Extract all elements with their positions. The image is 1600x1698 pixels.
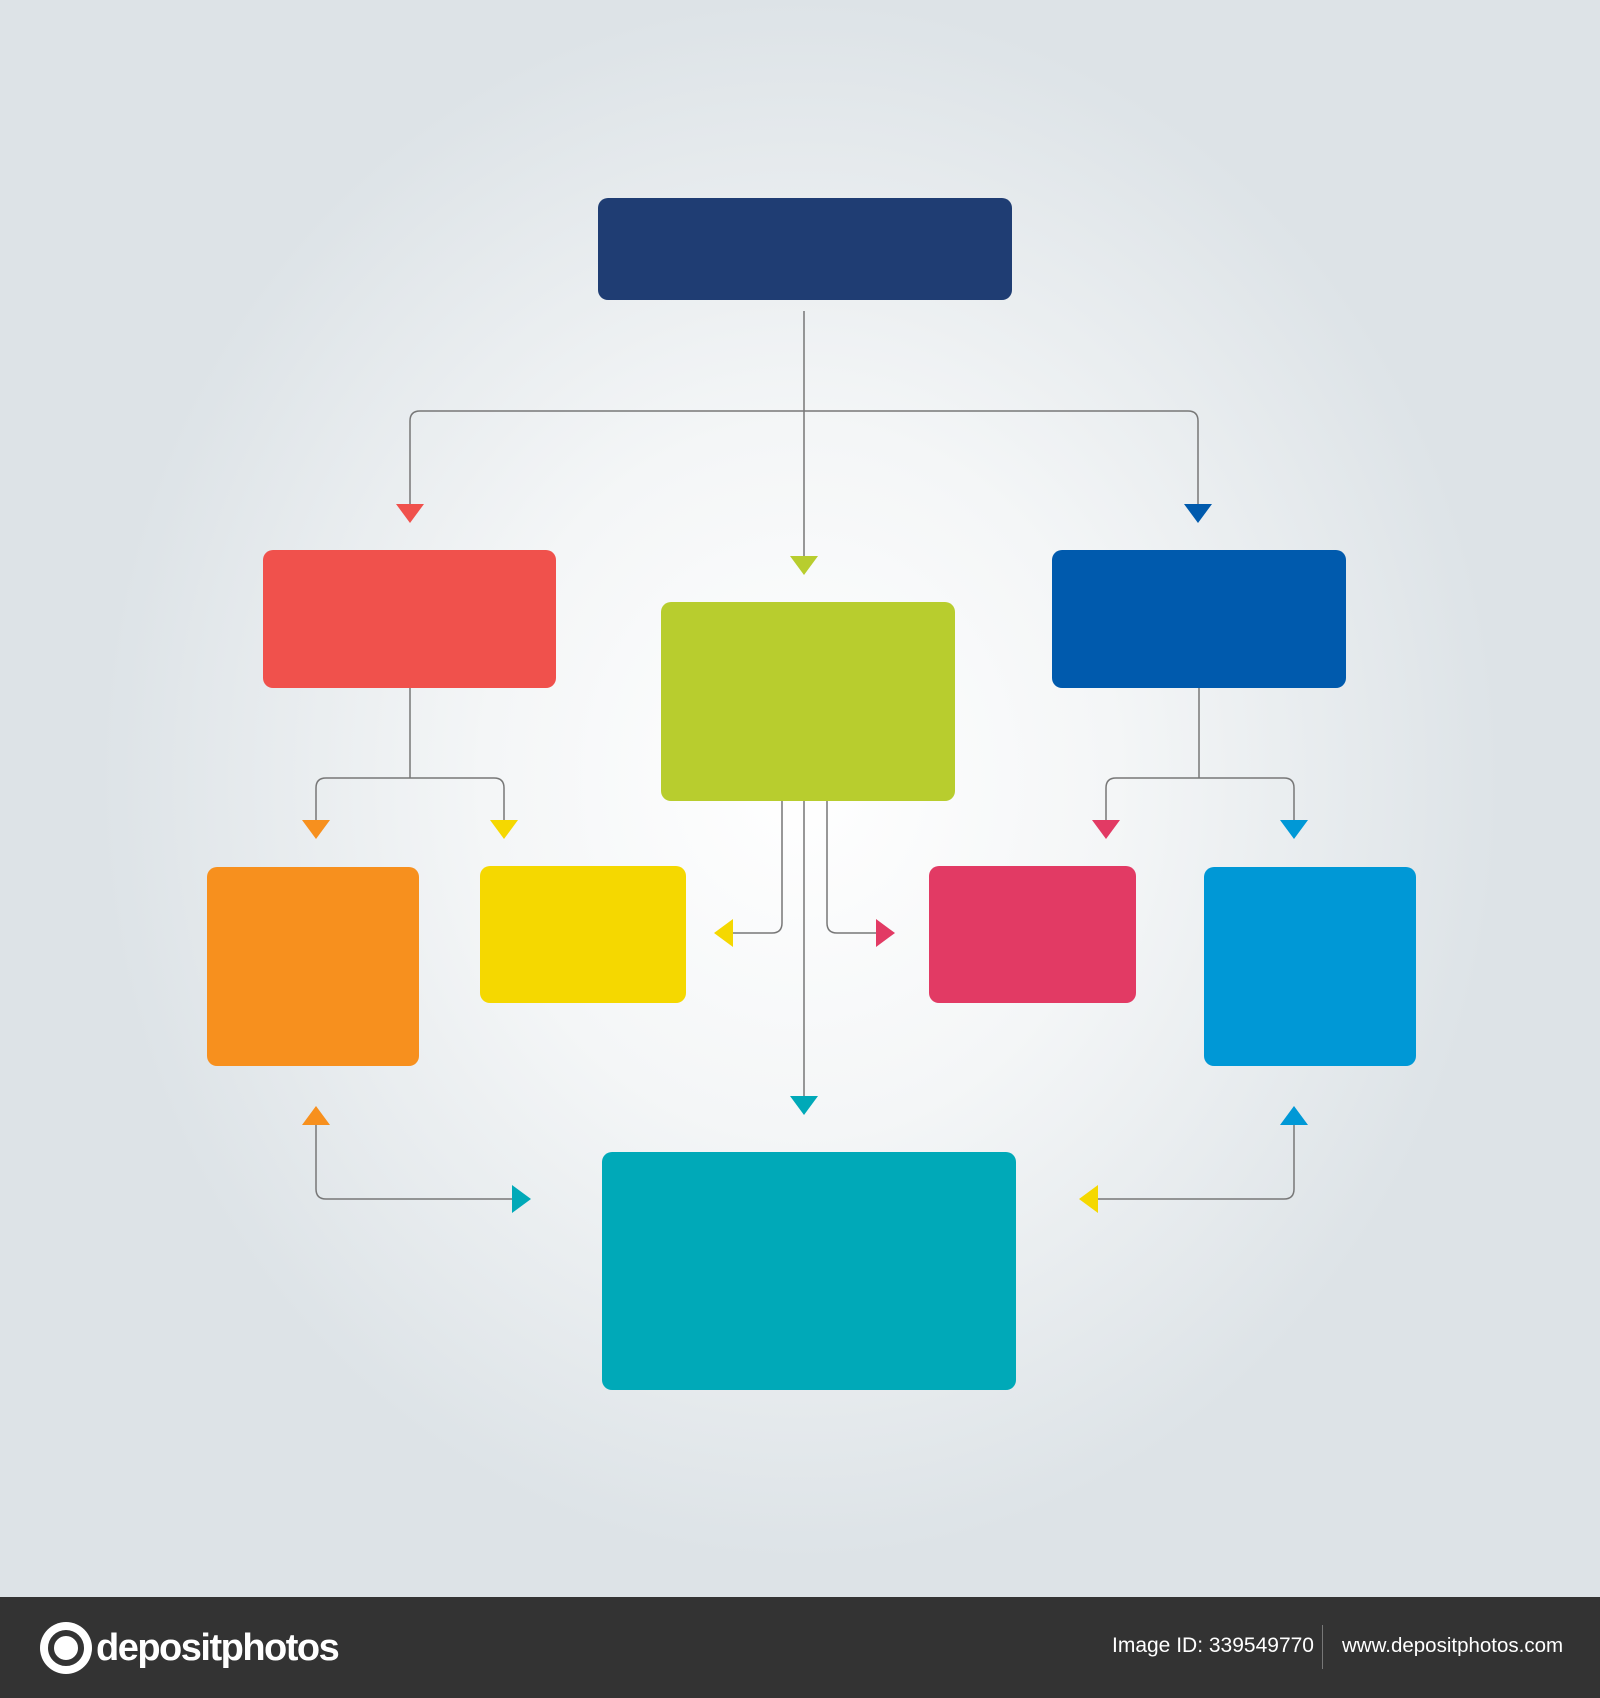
footer image id: Image ID: 339549770 [1112,1634,1314,1657]
arrow: light blue up [1280,1106,1308,1125]
box: blue [1052,550,1346,688]
arrow: orange up [302,1106,330,1125]
arrow: green [790,556,818,575]
footer bar [0,1597,1600,1698]
footer logo: depositphotos [96,1626,338,1668]
arrow: light blue [1280,820,1308,839]
footer logo [40,1622,338,1674]
box: green [661,602,955,801]
arrow: yellow left [714,919,733,947]
arrow: yellow left bottom [1079,1185,1098,1213]
arrow: teal down [790,1096,818,1115]
arrow: pink right [876,919,895,947]
connector lines [316,311,1294,1199]
arrow: dark blue [1184,504,1212,523]
arrow: red [396,504,424,523]
arrow: orange [302,820,330,839]
box: orange [207,867,419,1066]
box: light blue [1204,867,1416,1066]
box: top [598,198,1012,300]
box: pink [929,866,1136,1003]
box: yellow [480,866,686,1003]
box: teal [602,1152,1016,1390]
footer url: www.depositphotos.com [1342,1634,1563,1657]
box: red [263,550,556,688]
arrow: teal right [512,1185,531,1213]
arrow: pink [1092,820,1120,839]
arrow: yellow [490,820,518,839]
